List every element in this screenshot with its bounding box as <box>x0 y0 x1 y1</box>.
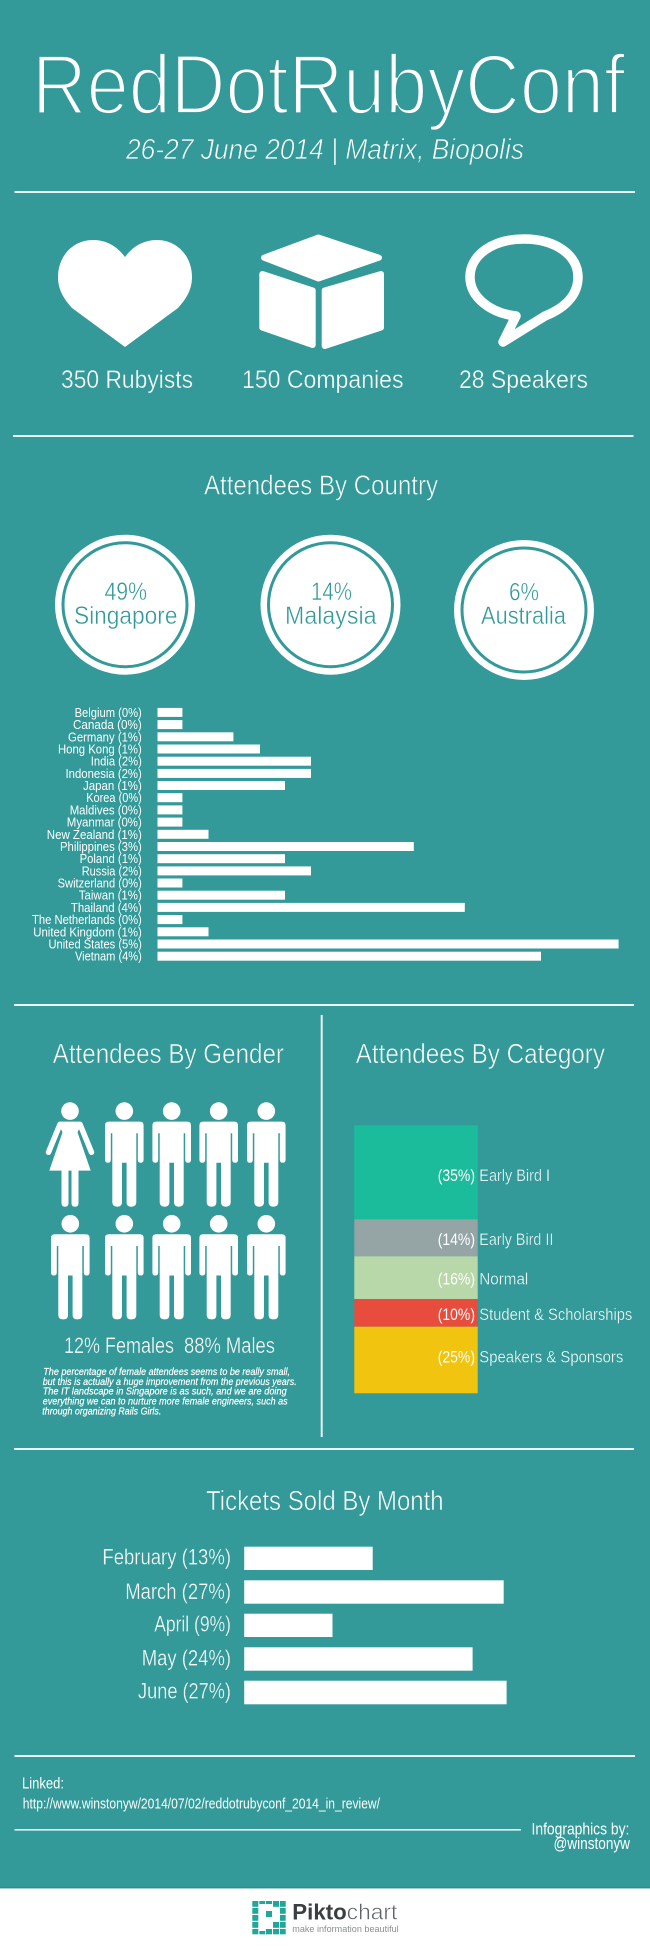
category labels: (35%) <box>438 1166 475 1185</box>
icon: woman <box>48 1102 92 1207</box>
icon: box <box>262 238 381 346</box>
text block: link <box>22 1775 381 1812</box>
stat: speakers: 28 Speakers <box>459 366 588 394</box>
heading: tickets sold by month: Tickets Sold By Month <box>206 1485 444 1516</box>
text block: gender note: The percentage of female attendees seems to be really small, <box>43 1366 290 1378</box>
category labels: (25%) <box>438 1348 475 1367</box>
bar chart: attendees by country: Switzerland (0%) <box>58 876 142 890</box>
text block: gender note <box>42 1366 297 1418</box>
heading: attendees by category: Attendees By Category <box>356 1038 605 1069</box>
bar chart: attendees by country: Myanmar (0%) <box>67 815 142 830</box>
text block: gender note: through organizing Rails Girls. <box>42 1406 161 1418</box>
category labels: (14%) <box>438 1230 475 1249</box>
bar chart: tickets sold by month: June (27%) <box>138 1678 231 1703</box>
category labels: Normal <box>479 1269 528 1288</box>
text block: link: Linked: <box>22 1775 64 1792</box>
bar chart: attendees by country: Canada (0%) <box>73 717 142 732</box>
stat: companies: 150 Companies <box>242 366 404 394</box>
category labels: Speakers & Sponsors <box>479 1348 623 1367</box>
logo wordmark: Pikto <box>292 1899 347 1924</box>
circle: Australia <box>454 540 594 680</box>
bar chart: attendees by country: Germany (1%) <box>68 729 142 744</box>
bar chart: tickets sold by month: March (27%) <box>125 1579 231 1604</box>
text block: link: http://www.winstonyw/2014/07/02/reddotrubyconf_2014_in_review/ <box>23 1796 381 1812</box>
bar chart: tickets sold by month: April (9%) <box>154 1612 231 1637</box>
bar chart: attendees by country: Thailand (4%) <box>71 900 142 915</box>
circle: Malaysia: 14% <box>311 578 352 606</box>
bar chart: tickets sold by month: February (13%) <box>102 1544 231 1569</box>
text block: gender note: everything we can to nurture more female engineers, such as <box>43 1396 288 1408</box>
bar chart: attendees by country: United States (5%) <box>48 936 142 952</box>
bar chart: attendees by country: Taiwan (1%) <box>79 888 142 903</box>
text block: credit <box>532 1819 631 1853</box>
logo wordmark: make information beautiful <box>292 1924 399 1935</box>
panel: attendees by gender <box>42 1038 297 1418</box>
bar chart: attendees by country: The Netherlands (0%) <box>32 912 142 927</box>
circle: Malaysia <box>260 535 400 675</box>
bar chart: attendees by country: Hong Kong (1%) <box>58 742 142 756</box>
category labels: (16%) <box>438 1269 475 1288</box>
category labels: (10%) <box>438 1305 475 1324</box>
bar chart: attendees by country: Vietnam (4%) <box>75 949 142 964</box>
bar chart: attendees by country: Japan (1%) <box>83 778 142 793</box>
pictogram: ten people, one female <box>48 1102 286 1319</box>
stat: rubyists: 350 Rubyists <box>61 366 193 394</box>
icons: men <box>51 1102 286 1319</box>
gender totals <box>64 1333 275 1358</box>
bar chart: attendees by country: United Kingdom (1%) <box>33 924 142 939</box>
bar chart: attendees by country: New Zealand (1%) <box>47 827 142 842</box>
category labels <box>438 1166 632 1367</box>
text block: credit: Infographics by: <box>532 1819 629 1838</box>
panel: headline stats <box>58 238 588 394</box>
gender totals: 88% Males <box>184 1333 275 1358</box>
bar chart: tickets sold by month: May (24%) <box>142 1646 231 1671</box>
bar chart: attendees by country: Belgium (0%) <box>75 705 142 720</box>
bar chart: attendees by country: Poland (1%) <box>80 851 142 866</box>
text block: gender note: The IT landscape in Singapore is as such, and we are doing <box>43 1386 287 1398</box>
stacked bar: categories <box>354 1125 478 1393</box>
circle: Singapore: 49% <box>104 578 147 606</box>
icon: heart <box>58 240 192 347</box>
circle: Australia: Australia <box>481 602 566 630</box>
bar chart: attendees by country: Indonesia (2%) <box>66 766 142 781</box>
logo wordmark: chart <box>347 1899 397 1924</box>
bar chart: attendees by country <box>32 705 619 964</box>
heading: attendees by gender: Attendees By Gender <box>53 1038 284 1069</box>
panel: footer <box>0 1887 650 1948</box>
subtitle: date and venue: 26-27 June 2014 | Matrix, Biopolis <box>125 134 524 166</box>
circle: Australia: 6% <box>509 578 539 606</box>
bar chart: tickets sold by month <box>102 1544 507 1704</box>
icon: piktochart logo <box>252 1901 286 1934</box>
panel: top countries circles <box>55 535 594 680</box>
logo wordmark <box>292 1899 399 1935</box>
text block: gender note: but this is actually a huge improvement from the previous years. <box>43 1376 297 1388</box>
icon: speech bubble <box>470 239 578 342</box>
bar chart: attendees by country: Philippines (3%) <box>60 839 142 854</box>
circle: Malaysia: Malaysia <box>285 602 377 630</box>
gender totals: 12% Females <box>64 1333 174 1358</box>
circle: Singapore: Singapore <box>74 602 178 630</box>
heading: attendees by country: Attendees By Country <box>204 470 438 500</box>
panel: attendees by category <box>354 1038 632 1393</box>
bar chart: attendees by country: India (2%) <box>91 754 142 769</box>
bar chart: attendees by country: Maldives (0%) <box>70 802 142 817</box>
text block: credit: @winstonyw <box>554 1834 631 1853</box>
bar chart: attendees by country: Korea (0%) <box>86 790 142 805</box>
circle: Singapore <box>55 535 195 675</box>
bar chart: attendees by country: Russia (2%) <box>82 863 142 878</box>
category labels: Early Bird II <box>479 1230 553 1249</box>
category labels: Early Bird I <box>479 1166 550 1185</box>
